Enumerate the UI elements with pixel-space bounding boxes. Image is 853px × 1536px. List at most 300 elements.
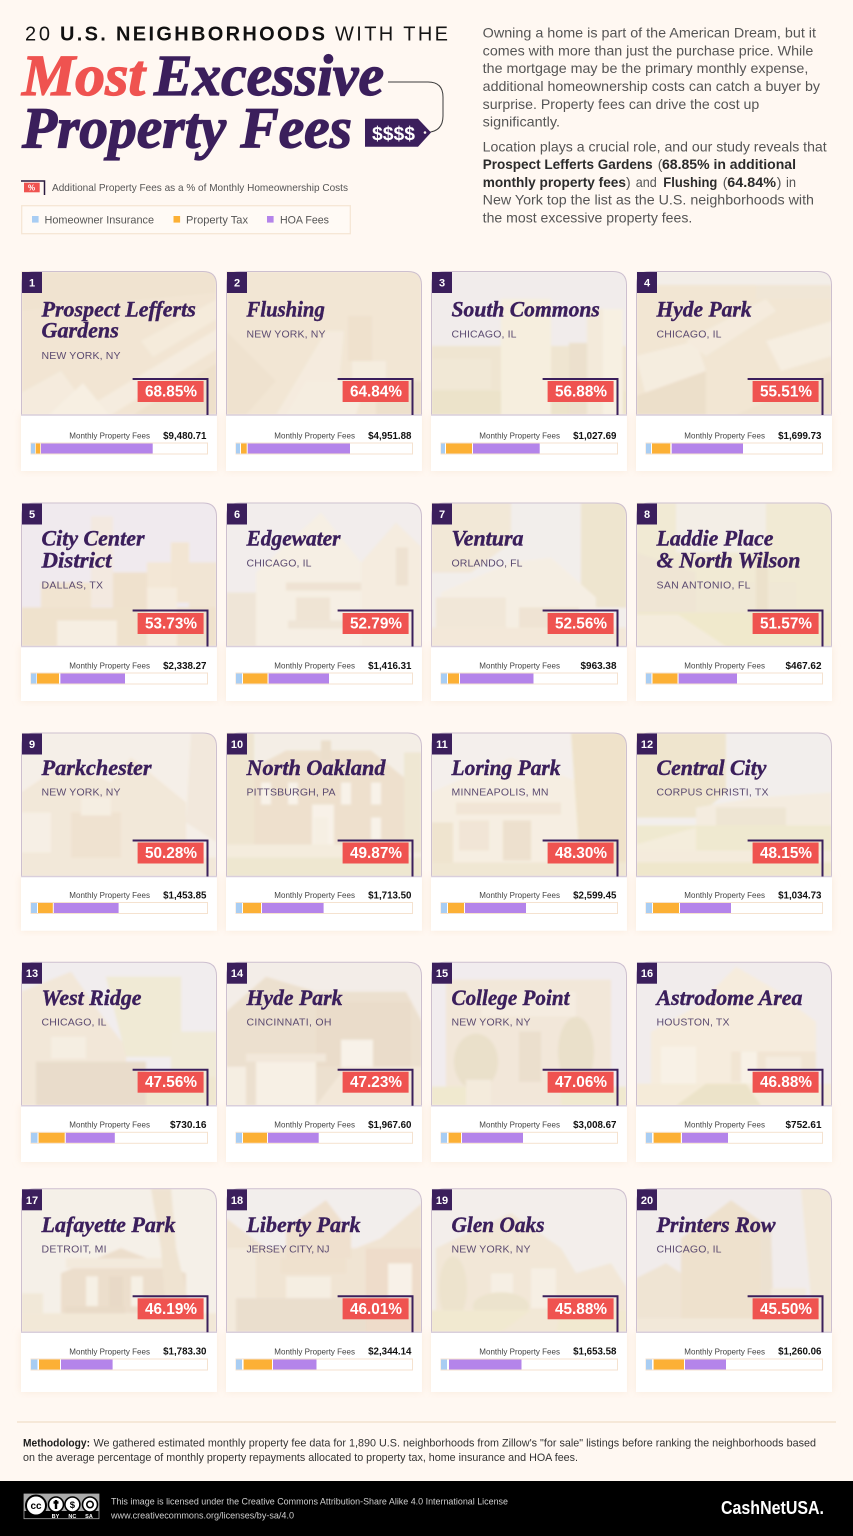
fee label and value: [479, 431, 617, 442]
intro text block: 64.84%: [727, 174, 777, 190]
fee label and value: [69, 660, 207, 672]
rank badge: [637, 272, 657, 293]
photo: white two-storey house: [226, 502, 422, 646]
fee label and value: $3,008.67: [573, 1120, 617, 1131]
fee label and value: Monthly Property Fees: [684, 890, 765, 900]
fee label and value: [684, 1346, 822, 1358]
title: WITH THE: [335, 24, 448, 46]
percentage callout: [748, 610, 822, 646]
neighborhood name: Ventura: [452, 526, 524, 551]
city: NEW YORK, NY: [246, 328, 326, 340]
fee label and value: $1,453.85: [163, 890, 207, 901]
fee label and value: $2,599.45: [573, 890, 617, 901]
percentage callout: 47.06%: [555, 1074, 607, 1091]
rank badge: [637, 1189, 657, 1210]
neighborhood name: Central City: [656, 755, 767, 780]
stacked bar: [31, 902, 208, 914]
panel: rank 1 Prospect Lefferts Gardens: [21, 271, 217, 471]
city: CHICAGO, IL: [656, 1243, 722, 1255]
rank badge: 11: [436, 739, 448, 751]
neighborhood name: [40, 526, 145, 572]
neighborhood name: Hyde Park: [246, 985, 342, 1010]
percentage callout: [133, 1070, 208, 1106]
legend: fee categories: Property Tax: [186, 214, 248, 226]
data panel: [636, 1332, 832, 1392]
panel: rank 18 Liberty Park: [226, 1188, 422, 1392]
fee label and value: Monthly Property Fees: [684, 431, 765, 441]
icon: Creative Commons BY-NC-SA badge: SA: [85, 1514, 93, 1520]
fee label and value: [69, 431, 207, 442]
data panel: [431, 415, 627, 471]
photo: downtown skyline: [21, 502, 217, 646]
fee label and value: Monthly Property Fees: [274, 660, 355, 670]
panel: rank 2 Flushing: [226, 271, 422, 471]
fee label and value: $4,951.88: [368, 431, 412, 442]
photo: high-rise towers: [431, 271, 627, 415]
fee label and value: [69, 890, 207, 901]
methodology note: We gathered estimated monthly property fee data for 1,890 U.S. neighborhoods from Zillow's "for sale" listings before ranking the neighborhoods based: [94, 1438, 816, 1450]
rank badge: [22, 504, 42, 524]
data panel: [636, 876, 832, 931]
stacked bar: [31, 673, 208, 684]
percentage callout: 48.30%: [555, 845, 607, 862]
data panel: [431, 646, 627, 701]
panel: rank 12 Central City: [636, 732, 832, 931]
city: ORLANDO, FL: [452, 558, 523, 570]
panel: rank 8 Laddie Place & North Wilson: [636, 502, 832, 701]
percentage callout: 47.56%: [145, 1074, 197, 1091]
intro text block: the most excessive property fees.: [483, 209, 692, 225]
intro text block: the mortgage may be the primary monthly expense,: [483, 60, 808, 76]
stacked bar: [236, 1359, 412, 1370]
methodology note: [23, 1438, 816, 1464]
city: NEW YORK, NY: [452, 1017, 530, 1029]
neighborhood name: College Point: [452, 985, 570, 1010]
neighborhood name: North Oakland: [245, 755, 386, 780]
fee label and value: $1,713.50: [368, 890, 412, 901]
fee label and value: [479, 1346, 617, 1358]
stacked bar: [646, 1359, 822, 1370]
stacked bar: [441, 673, 618, 684]
neighborhood name: [40, 297, 196, 343]
title: Most: [21, 43, 147, 108]
rank badge: 3: [439, 278, 445, 290]
logo: CashNetUSA: CashNetUSA.: [721, 1498, 824, 1518]
icon: Creative Commons BY-NC-SA badge: $: [70, 1500, 76, 1511]
city: NEW YORK, NY: [42, 787, 120, 799]
neighborhood name: Gardens: [42, 318, 119, 343]
intro text block: and: [636, 174, 657, 190]
stacked bar: [646, 673, 822, 684]
neighborhood name: Glen Oaks: [452, 1212, 544, 1237]
fee label and value: $1,416.31: [368, 661, 412, 672]
city: CHICAGO, IL: [42, 1017, 107, 1029]
data panel: [431, 1106, 627, 1162]
fee label and value: Monthly Property Fees: [479, 1120, 560, 1130]
data panel: [226, 1106, 422, 1162]
intro text block: 68.85% in additional: [662, 156, 796, 172]
rank badge: [227, 1189, 247, 1210]
icon: price tag with connector string: [365, 82, 443, 147]
legend: fee categories: HOA Fees: [280, 214, 329, 226]
intro text block: New York top the list as the U.S. neighborhoods with: [483, 192, 814, 208]
fee label and value: Monthly Property Fees: [274, 890, 355, 900]
percentage callout: [543, 610, 618, 646]
rank badge: [227, 734, 247, 754]
rank badge: 8: [644, 509, 650, 521]
rank badge: 6: [234, 509, 240, 521]
fee label and value: [274, 431, 412, 442]
legend: fee categories: Homeowner Insurance: [44, 214, 154, 226]
fee label and value: [479, 660, 617, 672]
panel: rank 9 Parkchester: [21, 732, 217, 931]
rank badge: [432, 963, 452, 984]
legend: fee categories: [22, 206, 350, 234]
percentage callout: 50.28%: [145, 845, 197, 862]
percentage callout: [133, 1296, 208, 1332]
rank badge: [432, 272, 452, 293]
percentage callout: [338, 379, 412, 415]
intro text block: Location plays a crucial role, and our study reveals that: [483, 138, 827, 154]
percentage callout: 51.57%: [760, 616, 812, 632]
percentage callout: 46.88%: [760, 1074, 812, 1091]
fee label and value: [69, 1120, 207, 1131]
panel: rank 14 Hyde Park: [226, 962, 422, 1162]
panel: rank 5 City Center District: [21, 502, 217, 701]
photo: aerial of city blocks: [636, 271, 832, 415]
fee label and value: Monthly Property Fees: [274, 431, 355, 441]
fee label and value: [274, 890, 412, 901]
fee label and value: [274, 660, 412, 672]
percentage callout: [543, 1070, 618, 1106]
rank badge: [22, 963, 42, 984]
fee label and value: Monthly Property Fees: [69, 890, 150, 900]
data panel: [21, 1106, 217, 1162]
stacked bar: [441, 443, 618, 454]
percentage callout: 46.19%: [145, 1301, 197, 1318]
title: U.S. NEIGHBORHOODS: [60, 24, 325, 46]
percentage callout: [338, 1070, 412, 1106]
panel: rank 13 West Ridge: [21, 962, 217, 1162]
rank badge: [227, 504, 247, 524]
icon: Creative Commons BY-NC-SA badge: NC: [68, 1514, 76, 1520]
rank badge: 4: [644, 278, 651, 290]
percentage callout: 46.01%: [350, 1301, 402, 1318]
fee label and value: [274, 1120, 412, 1131]
stacked bar: [31, 1359, 208, 1370]
photo: brick townhouses: [226, 1188, 422, 1332]
neighborhood name: District: [40, 547, 112, 572]
fee label and value: Monthly Property Fees: [274, 1120, 355, 1130]
percentage callout: [133, 840, 208, 876]
rank badge: [637, 504, 657, 524]
neighborhood name: Prospect Lefferts: [40, 297, 196, 322]
percentage callout: [748, 840, 822, 876]
photo: aerial of avenue and towers: [226, 271, 422, 415]
data panel: [226, 1332, 422, 1392]
legend: percentage marker: Additional Property Fees as a % of Monthly Homeownership Costs: [52, 182, 348, 194]
photo: tall brick loft building: [636, 1188, 832, 1332]
city: CHICAGO, IL: [452, 328, 517, 340]
rank badge: 13: [26, 968, 38, 980]
data panel: [636, 415, 832, 471]
rank badge: [22, 1189, 42, 1210]
rank badge: 7: [439, 509, 445, 521]
stacked bar: [441, 1359, 618, 1370]
intro text block: significantly.: [483, 114, 560, 130]
neighborhood name: Astrodome Area: [655, 985, 803, 1010]
stacked bar: [236, 673, 412, 684]
license text: [110, 1496, 508, 1520]
photo: brick colonial house: [226, 732, 422, 876]
stacked bar: [646, 443, 822, 454]
footer bar: [0, 1481, 853, 1536]
percentage callout: [748, 379, 822, 415]
neighborhood name: [656, 526, 800, 572]
methodology note: Methodology:: [23, 1438, 90, 1450]
percentage callout: 56.88%: [555, 384, 607, 400]
city: CHICAGO, IL: [656, 328, 722, 340]
photo: house behind iron fence and tree: [21, 962, 217, 1106]
city: CINCINNATI, OH: [246, 1017, 332, 1029]
rank badge: [432, 734, 452, 754]
percentage callout: 45.88%: [555, 1301, 607, 1318]
methodology note: on the average percentage of monthly property repayments allocated to property tax, home insurance and HOA fees.: [23, 1452, 578, 1464]
photo: dark house with garage: [226, 962, 422, 1106]
neighborhood name: West Ridge: [42, 985, 142, 1010]
percentage callout: 47.23%: [350, 1074, 402, 1091]
panel: rank 3 South Commons: [431, 271, 627, 471]
intro text block: ): [626, 174, 631, 190]
license text: This image is licensed under the Creative Commons Attribution-Share Alike 4.0 International License: [111, 1496, 508, 1506]
data panel: [21, 415, 217, 471]
stacked bar: [236, 1132, 412, 1143]
city: CHICAGO, IL: [246, 558, 312, 570]
fee label and value: $1,260.06: [778, 1347, 822, 1358]
stacked bar: [31, 1132, 208, 1143]
stacked bar: [236, 443, 412, 454]
fee label and value: [684, 431, 822, 442]
city: NEW YORK, NY: [452, 1243, 530, 1255]
fee label and value: $1,034.73: [778, 890, 822, 901]
photo: gabled house and front lawn: [431, 1188, 627, 1332]
neighborhood name: Flushing: [246, 297, 325, 322]
fee label and value: Monthly Property Fees: [69, 431, 150, 441]
data panel: [431, 876, 627, 931]
intro text block: comes with more than just the purchase price. While: [483, 42, 814, 58]
rank badge: 15: [436, 968, 448, 980]
stacked bar: [441, 902, 618, 914]
intro text block: Owning a home is part of the American Dream, but it: [483, 25, 816, 41]
rank badge: [22, 734, 42, 754]
percentage callout: [133, 610, 208, 646]
title: Excessive: [153, 43, 384, 108]
stacked bar: [646, 1132, 822, 1143]
intro text block: (: [723, 174, 728, 190]
icon: Creative Commons BY-NC-SA badge: [24, 1494, 99, 1520]
fee label and value: Monthly Property Fees: [684, 660, 765, 670]
percentage callout: [543, 840, 618, 876]
panel: rank 20 Printers Row: [636, 1188, 832, 1392]
photo: cream suburban house: [636, 962, 832, 1106]
percentage callout: [338, 1296, 412, 1332]
title: 20: [25, 24, 50, 46]
rank badge: [227, 963, 247, 984]
percentage callout: 52.56%: [555, 616, 607, 632]
fee label and value: Monthly Property Fees: [69, 1120, 150, 1130]
percentage callout: [338, 610, 412, 646]
data panel: [226, 876, 422, 931]
panel: rank 6 Edgewater: [226, 502, 422, 701]
neighborhood name: Parkchester: [40, 755, 152, 780]
fee label and value: [274, 1346, 412, 1358]
neighborhood name: Liberty Park: [246, 1212, 360, 1237]
percentage callout: [543, 379, 618, 415]
city: DETROIT, MI: [42, 1243, 106, 1255]
intro text block: Flushing: [663, 174, 717, 190]
fee label and value: $1,699.73: [778, 431, 822, 442]
photo: brick house behind bare tree: [21, 1188, 217, 1332]
neighborhood name: Hyde Park: [656, 297, 752, 322]
panel: rank 11 Loring Park: [431, 732, 627, 931]
fee label and value: $2,344.14: [368, 1347, 412, 1358]
fee label and value: Monthly Property Fees: [684, 1346, 765, 1356]
city: CORPUS CHRISTI, TX: [656, 787, 768, 799]
panel: rank 16 Astrodome Area: [636, 962, 832, 1162]
percentage callout: [338, 840, 412, 876]
fee label and value: Monthly Property Fees: [684, 1120, 765, 1130]
rank badge: 10: [231, 739, 243, 751]
data panel: [636, 646, 832, 701]
fee label and value: [479, 1120, 617, 1131]
rank badge: [432, 504, 452, 524]
city: JERSEY CITY, NJ: [246, 1243, 330, 1255]
photo: house with palm trees: [431, 502, 627, 646]
neighborhood name: South Commons: [452, 297, 600, 322]
intro text block: in: [786, 174, 796, 190]
fee label and value: $1,967.60: [368, 1120, 412, 1131]
percentage callout: [133, 379, 208, 415]
neighborhood name: Loring Park: [451, 755, 561, 780]
city: SAN ANTONIO, FL: [656, 579, 751, 591]
fee label and value: Monthly Property Fees: [69, 660, 150, 670]
rank badge: 2: [234, 278, 240, 290]
rank badge: 17: [26, 1195, 38, 1207]
rank badge: [432, 1189, 452, 1210]
title: [21, 24, 448, 161]
city: HOUSTON, TX: [656, 1017, 730, 1029]
fee label and value: $9,480.71: [163, 431, 207, 442]
rank badge: 5: [29, 509, 35, 521]
rank badge: [637, 963, 657, 984]
data panel: [21, 876, 217, 931]
fee label and value: Monthly Property Fees: [479, 890, 560, 900]
neighborhood name: Laddie Place: [656, 526, 774, 551]
panel: rank 17 Lafayette Park: [21, 1188, 217, 1392]
rank badge: 1: [29, 278, 35, 290]
photo: bungalow with lawn and tree: [636, 732, 832, 876]
intro text block: additional homeownership costs can catch a buyer by: [483, 78, 820, 94]
rank badge: 14: [231, 968, 244, 980]
intro text block: (: [658, 156, 663, 172]
icon: Creative Commons BY-NC-SA badge: BY: [52, 1514, 60, 1520]
percentage callout: 68.85%: [145, 384, 197, 400]
fee label and value: [69, 1346, 207, 1358]
fee label and value: $2,338.27: [163, 661, 207, 672]
intro text block: ): [777, 174, 781, 190]
fee label and value: [479, 890, 617, 901]
legend: percentage marker: %: [28, 184, 35, 192]
fee label and value: Monthly Property Fees: [69, 1346, 150, 1356]
fee label and value: [684, 890, 822, 901]
neighborhood name: City Center: [42, 526, 145, 551]
fee label and value: $1,653.58: [573, 1347, 617, 1358]
percentage callout: 49.87%: [350, 845, 402, 862]
rank badge: 9: [29, 739, 35, 751]
panel: rank 15 College Point: [431, 962, 627, 1162]
data panel: [636, 1106, 832, 1162]
city: MINNEAPOLIS, MN: [452, 787, 548, 799]
fee label and value: $752.61: [786, 1120, 822, 1131]
rank badge: 19: [436, 1195, 448, 1207]
rank badge: [227, 272, 247, 293]
data panel: [21, 646, 217, 701]
data panel: [226, 646, 422, 701]
data panel: [21, 1332, 217, 1392]
photo: aerial row houses: [21, 271, 217, 415]
rank badge: 12: [641, 739, 653, 751]
percentage callout: 45.50%: [760, 1301, 812, 1318]
intro text block: surprise. Property fees can drive the cost up: [483, 96, 760, 112]
percentage callout: 64.84%: [350, 384, 402, 400]
neighborhood name: Printers Row: [656, 1212, 776, 1237]
stacked bar: [441, 1132, 618, 1143]
fee label and value: [684, 1120, 822, 1131]
percentage callout: [543, 1296, 618, 1332]
neighborhood name: Edgewater: [246, 526, 341, 551]
percentage callout: 55.51%: [760, 384, 812, 400]
fee label and value: $1,027.69: [573, 431, 617, 442]
rank badge: 16: [641, 968, 653, 980]
fee label and value: Monthly Property Fees: [479, 1346, 560, 1356]
fee label and value: $467.62: [786, 661, 822, 672]
rank badge: [637, 734, 657, 754]
city: DALLAS, TX: [42, 579, 103, 591]
stacked bar: [236, 902, 412, 914]
panel: rank 19 Glen Oaks: [431, 1188, 627, 1392]
title: Property Fees: [21, 96, 352, 161]
rank badge: 20: [641, 1195, 653, 1207]
neighborhood name: Lafayette Park: [40, 1212, 176, 1237]
city: NEW YORK, NY: [42, 350, 120, 362]
fee label and value: $1,783.30: [163, 1347, 207, 1358]
intro text block: [483, 25, 827, 225]
fee label and value: $963.38: [580, 661, 617, 672]
data panel: [431, 1332, 627, 1392]
fee label and value: Monthly Property Fees: [274, 1346, 355, 1356]
license text: www.creativecommons.org/licenses/by-sa/4.0: [110, 1510, 294, 1520]
percentage callout: [748, 1070, 822, 1106]
fee label and value: Monthly Property Fees: [479, 660, 560, 670]
fee label and value: $730.16: [170, 1120, 207, 1131]
neighborhood name: & North Wilson: [656, 547, 800, 572]
percentage callout: 53.73%: [145, 616, 197, 632]
data panel: [226, 415, 422, 471]
photo: tudor house, big tree and lawn: [636, 502, 832, 646]
panel: rank 10 North Oakland: [226, 732, 422, 931]
intro text block: Prospect Lefferts Gardens: [483, 156, 653, 172]
panel: rank 7 Ventura: [431, 502, 627, 701]
